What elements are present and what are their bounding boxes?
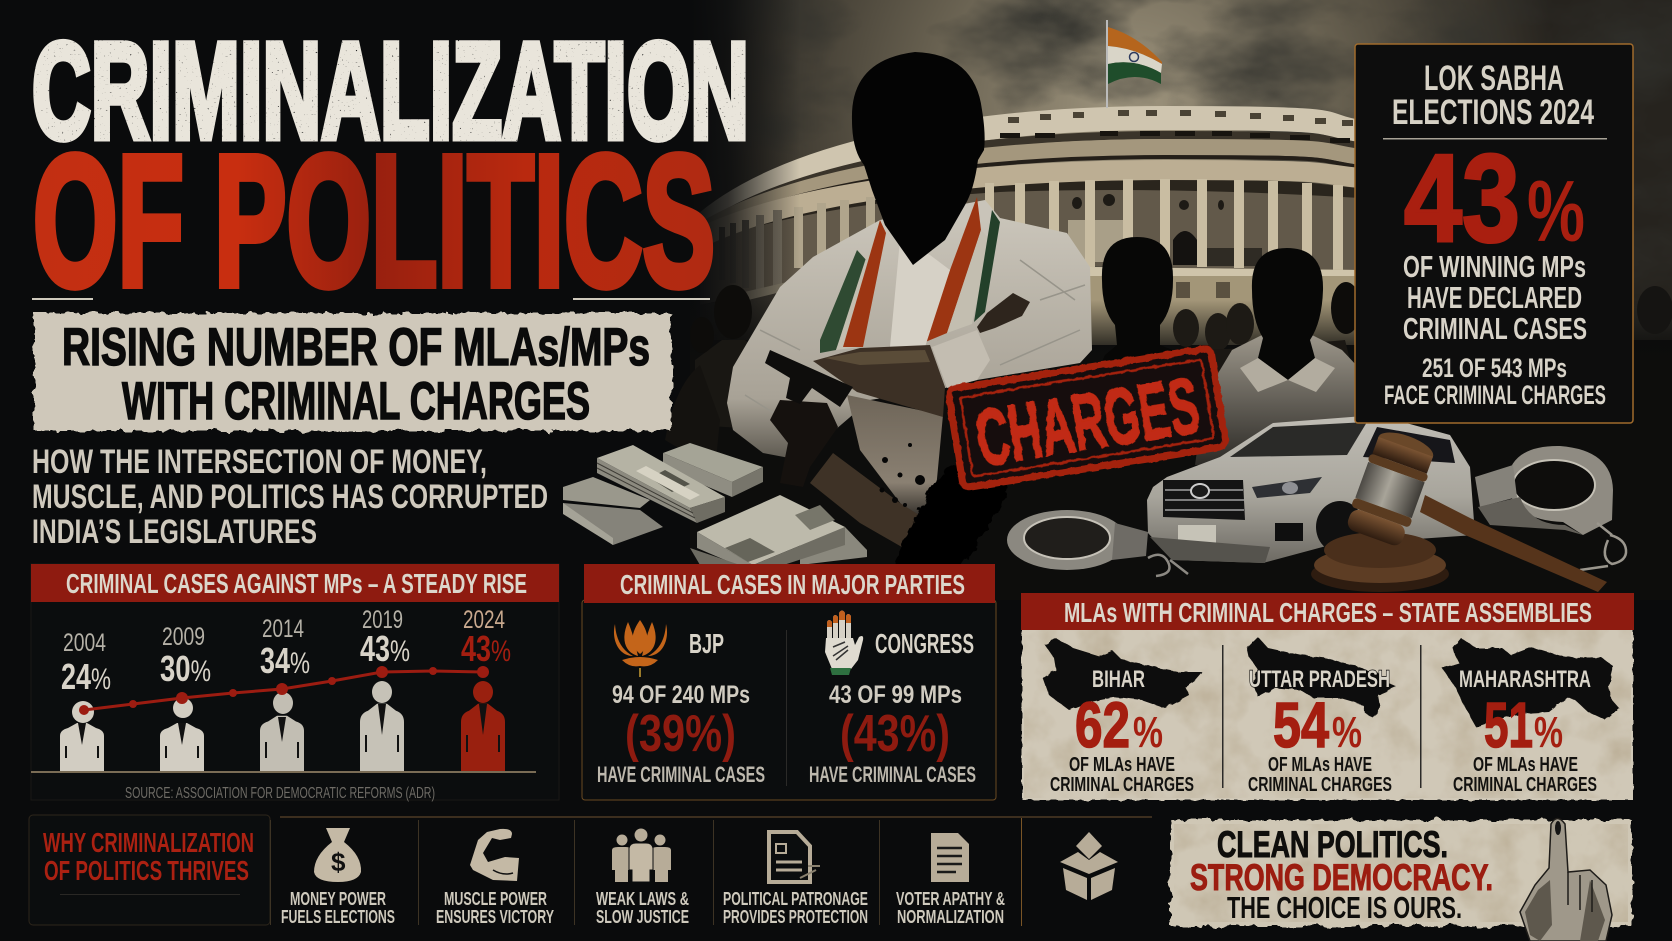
Congress label: CONGRESS bbox=[875, 628, 974, 659]
icon: group of people bbox=[612, 828, 671, 882]
Maharashtra: MAHARASHTRA bbox=[1459, 666, 1591, 693]
Uttar Pradesh: OF MLAs HAVE bbox=[1268, 754, 1372, 776]
panel heading bbox=[1392, 59, 1594, 132]
background scene: sky and parliament bbox=[690, 0, 1672, 600]
Bihar: 62 bbox=[1075, 689, 1130, 761]
voter apathy label: VOTER APATHY & bbox=[896, 889, 1005, 909]
torso and lower arm bbox=[847, 395, 943, 520]
ink splatter bbox=[880, 443, 1010, 575]
Maharashtra: OF MLAs HAVE bbox=[1473, 754, 1578, 776]
BJP label: BJP bbox=[689, 628, 724, 659]
subtitle text bbox=[62, 318, 650, 431]
icon: ballot box bbox=[1060, 832, 1118, 900]
man in white shirt at right bbox=[1195, 248, 1386, 465]
Maharashtra: 51 bbox=[1484, 689, 1533, 761]
description text: HOW THE INTERSECTION OF MONEY, bbox=[32, 443, 487, 481]
money power label: MONEY POWER bbox=[290, 889, 386, 909]
Uttar Pradesh: 54 bbox=[1273, 689, 1329, 761]
call to action text: CLEAN POLITICS. bbox=[1217, 824, 1448, 865]
stack far right bbox=[800, 525, 867, 565]
political patronage label: POLITICAL PATRONAGE bbox=[723, 889, 868, 909]
fog lamp bbox=[1275, 523, 1303, 541]
icon: inked finger hand bbox=[1520, 818, 1612, 941]
political patronage label: PROVIDES PROTECTION bbox=[723, 907, 868, 927]
Bihar: % bbox=[1133, 708, 1163, 757]
stat description: 251 OF 543 MPs bbox=[1422, 353, 1567, 383]
icon: Congress hand bbox=[825, 610, 863, 675]
Congress stats bbox=[809, 681, 976, 787]
stack front left bbox=[597, 445, 725, 523]
43 percent stat: 43 bbox=[1404, 130, 1520, 268]
plate bbox=[1178, 525, 1216, 543]
crossed forearm bbox=[813, 345, 945, 417]
pistol bbox=[765, 350, 853, 407]
handcuff right bbox=[1475, 446, 1626, 570]
subtitle text: WITH CRIMINAL CHARGES bbox=[122, 372, 590, 431]
percent labels bbox=[61, 628, 511, 697]
stack rear low bbox=[563, 477, 663, 545]
Bihar: BIHAR bbox=[1092, 666, 1145, 693]
panel title bbox=[43, 827, 254, 886]
Maharashtra bbox=[1442, 638, 1619, 796]
stamp label: CHARGES bbox=[970, 360, 1205, 483]
title rules bbox=[32, 298, 710, 300]
Bihar: CRIMINAL CHARGES bbox=[1050, 774, 1194, 796]
panel: state assemblies bbox=[1021, 593, 1634, 800]
stat description: HAVE DECLARED bbox=[1407, 280, 1582, 315]
icon: money bag: $ bbox=[331, 847, 346, 877]
muscle power label: ENSURES VICTORY bbox=[436, 907, 554, 927]
stack front large bbox=[697, 495, 845, 572]
icon: report bbox=[931, 833, 969, 882]
stat description bbox=[1384, 249, 1606, 410]
subtitle banner bbox=[34, 313, 671, 431]
money power label bbox=[281, 889, 395, 927]
wall details bbox=[1068, 194, 1262, 266]
parties heading: CRIMINAL CASES IN MAJOR PARTIES bbox=[620, 569, 965, 600]
chart heading: CRIMINAL CASES AGAINST MPs – A STEADY RISE bbox=[66, 568, 527, 599]
source note: SOURCE: ASSOCIATION FOR DEMOCRATIC REFORMS (ADR) bbox=[125, 785, 435, 802]
hand holding pistol bbox=[770, 400, 838, 487]
SUV bbox=[1147, 415, 1475, 563]
year labels: 2019 bbox=[362, 606, 403, 634]
title line 1: CRIMINALIZATION bbox=[32, 15, 749, 168]
year labels: 2004 bbox=[63, 629, 106, 657]
indian flag bbox=[1106, 20, 1162, 108]
windscreen bbox=[1230, 422, 1367, 457]
Congress stats: (43%) bbox=[840, 705, 950, 763]
panel: major parties bbox=[582, 564, 996, 800]
Uttar Pradesh: CRIMINAL CHARGES bbox=[1248, 774, 1392, 796]
percent labels: 34% bbox=[260, 640, 310, 681]
stat description: OF WINNING MPs bbox=[1403, 249, 1586, 284]
Congress stats: 43 OF 99 MPs bbox=[829, 681, 962, 709]
muscle power label bbox=[436, 889, 554, 927]
percent labels: 30% bbox=[160, 648, 211, 689]
trend line bbox=[79, 666, 489, 715]
year labels: 2014 bbox=[262, 615, 304, 643]
title line 2: OF POLITICS bbox=[33, 118, 715, 325]
shirt fold lines bbox=[745, 260, 1085, 420]
Uttar Pradesh: % bbox=[1332, 708, 1362, 757]
subtitle text: RISING NUMBER OF MLAs/MPs bbox=[62, 318, 650, 377]
political patronage label bbox=[723, 889, 868, 927]
Uttar Pradesh: UTTAR PRADESH bbox=[1249, 666, 1390, 693]
percent labels: 24% bbox=[61, 656, 111, 697]
kurta sleeves and chest bbox=[727, 200, 1092, 460]
year labels: 2009 bbox=[162, 623, 205, 651]
Uttar Pradesh bbox=[1247, 637, 1397, 796]
43 percent stat: % bbox=[1527, 164, 1585, 260]
parliament building bbox=[700, 110, 1360, 345]
weak laws label: SLOW JUSTICE bbox=[596, 907, 689, 927]
stat description: CRIMINAL CASES bbox=[1403, 311, 1587, 346]
BJP stats bbox=[597, 681, 765, 787]
headlight bbox=[1252, 477, 1322, 498]
description text: MUSCLE, AND POLITICS HAS CORRUPTED bbox=[32, 478, 548, 516]
Congress stats: HAVE CRIMINAL CASES bbox=[809, 762, 976, 787]
panel: clean politics call to action bbox=[1170, 818, 1632, 941]
stack rear right bbox=[663, 443, 763, 497]
call to action text: STRONG DEMOCRACY. bbox=[1190, 857, 1493, 898]
sash bbox=[820, 197, 1000, 353]
year labels: 2024 bbox=[463, 606, 505, 634]
Bihar: OF MLAs HAVE bbox=[1069, 754, 1175, 776]
left edge fade of scene bbox=[690, 0, 800, 345]
background crowd silhouettes bbox=[665, 237, 1672, 470]
head silhouette bbox=[852, 52, 985, 265]
icon: muscle arm bbox=[470, 829, 519, 881]
description text bbox=[32, 443, 548, 551]
voter apathy label: NORMALIZATION bbox=[897, 907, 1004, 927]
grille bbox=[1163, 480, 1245, 520]
call to action text bbox=[1190, 824, 1493, 925]
panel: why criminalization thrives bbox=[29, 815, 1152, 927]
BJP stats: HAVE CRIMINAL CASES bbox=[597, 762, 765, 787]
handcuff left bbox=[1007, 510, 1188, 576]
weak laws label: WEAK LAWS & bbox=[596, 889, 689, 909]
panel title: WHY CRIMINALIZATION bbox=[43, 827, 254, 858]
panel heading: ELECTIONS 2024 bbox=[1392, 93, 1594, 132]
panel: Lok Sabha 2024 bbox=[1355, 44, 1633, 423]
voter apathy label bbox=[896, 889, 1005, 927]
BJP stats: 94 OF 240 MPs bbox=[612, 681, 750, 709]
icon: money bag bbox=[314, 828, 361, 882]
percent labels: 43% bbox=[360, 628, 410, 669]
CHARGES stamp bbox=[948, 348, 1226, 488]
panel: criminal cases against MPs bbox=[31, 564, 559, 802]
BJP stats: (39%) bbox=[625, 705, 736, 763]
icon: document bbox=[769, 832, 820, 882]
description text: INDIA’S LEGISLATURES bbox=[32, 513, 317, 551]
muscle power label: MUSCLE POWER bbox=[444, 889, 547, 909]
call to action text: THE CHOICE IS OURS. bbox=[1227, 890, 1462, 925]
money power label: FUELS ELECTIONS bbox=[281, 907, 395, 927]
panel heading: LOK SABHA bbox=[1424, 59, 1564, 98]
Maharashtra: % bbox=[1534, 708, 1563, 757]
gavel bbox=[1311, 426, 1607, 592]
tucked hand bbox=[977, 293, 1030, 333]
percent labels: 43% bbox=[461, 628, 511, 669]
panel title: OF POLITICS THRIVES bbox=[44, 855, 249, 886]
Maharashtra: CRIMINAL CHARGES bbox=[1453, 774, 1597, 796]
weak laws label bbox=[596, 889, 689, 927]
central silhouette figure bbox=[727, 52, 1092, 575]
icon: BJP lotus bbox=[614, 620, 667, 677]
year labels bbox=[63, 606, 505, 657]
base of building bbox=[700, 265, 1360, 345]
cash stacks bbox=[563, 443, 867, 572]
Bihar bbox=[1043, 638, 1202, 796]
people figures bbox=[60, 681, 505, 771]
columns bbox=[985, 179, 1343, 273]
